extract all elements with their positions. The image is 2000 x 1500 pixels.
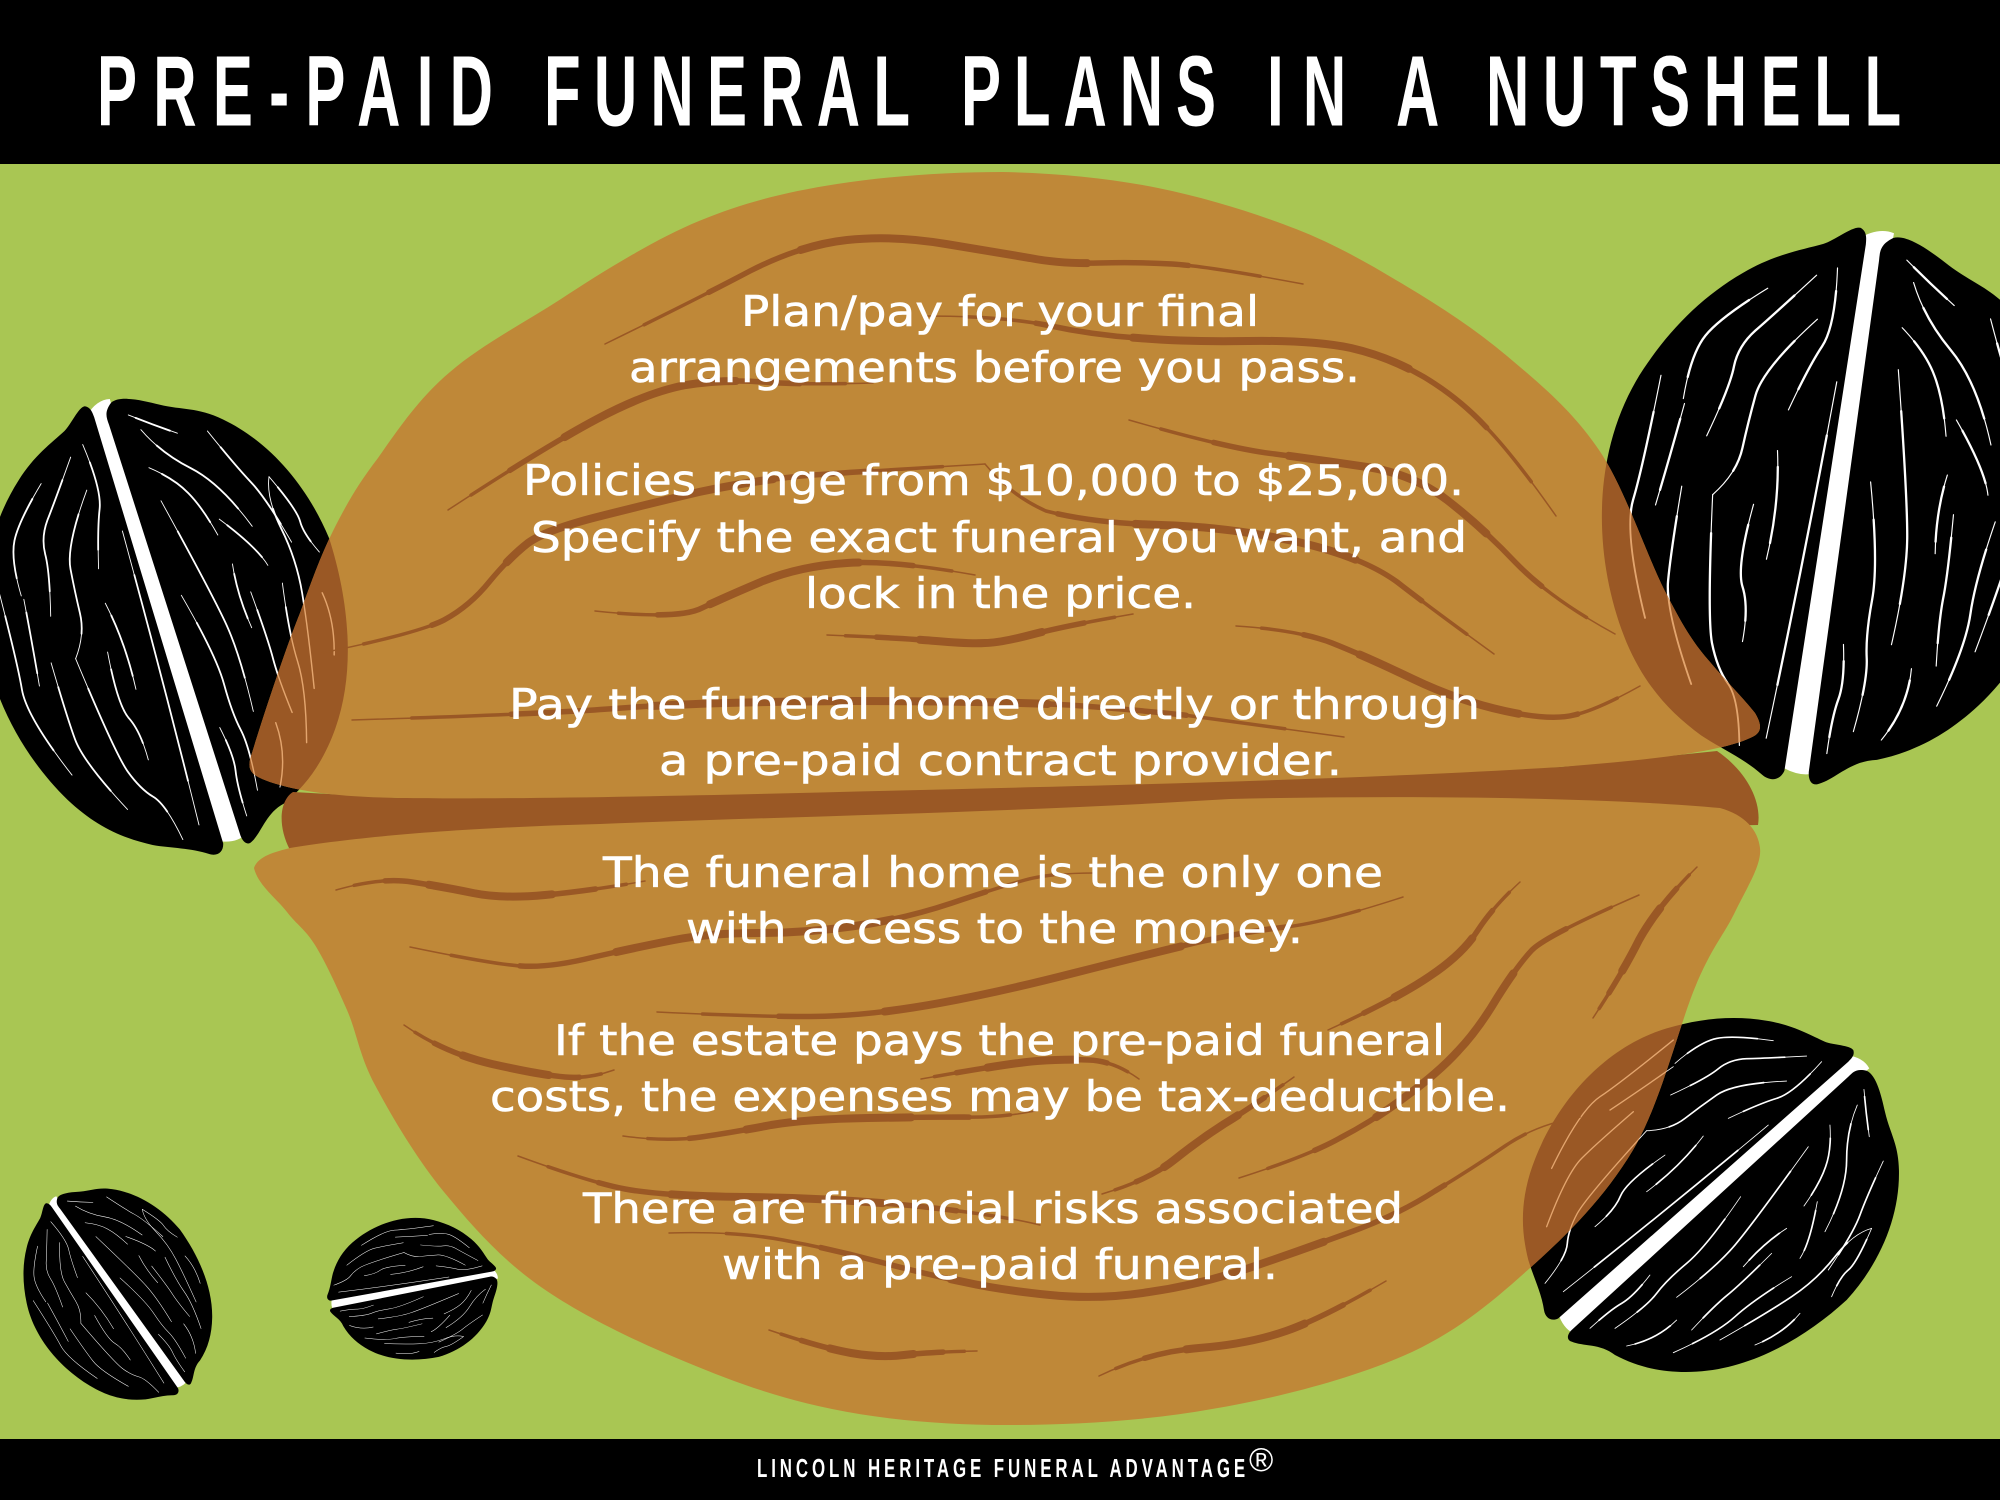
text block: pay the funeral home: a pre-paid contract provider. xyxy=(659,736,1342,785)
text block: access to the money: The funeral home is the only one xyxy=(602,848,1383,897)
footer brand text: ® xyxy=(1249,1441,1273,1478)
text block: plan and pay: arrangements before you pass. xyxy=(629,343,1360,392)
text block: access to the money xyxy=(602,848,1383,953)
text block: tax deductible: If the estate pays the pre-paid funeral xyxy=(554,1016,1445,1065)
icon: small walnut, bottom left xyxy=(15,1176,220,1412)
icon: walnut, bottom right xyxy=(1523,1018,1899,1372)
text block: policies range: lock in the price. xyxy=(805,569,1196,618)
title: PRE-PAID xyxy=(97,36,493,147)
icon: largest walnut, right xyxy=(1482,154,2000,859)
title xyxy=(97,36,1901,147)
text block: pay the funeral home: Pay the funeral home directly or through xyxy=(509,680,1480,729)
walnut overlaps seen through the nut xyxy=(249,462,1760,1268)
text block: tax deductible xyxy=(490,1016,1510,1121)
nut upper half xyxy=(249,172,1760,798)
header bar xyxy=(0,0,2000,164)
icon: giant walnut shell behind the text xyxy=(249,172,1760,1425)
title: A xyxy=(1396,36,1439,147)
nut shell veins xyxy=(322,238,1697,1376)
text block: policies range xyxy=(523,456,1467,618)
text block: policies range: Specify the exact funeral you want, and xyxy=(531,513,1467,562)
footer brand text: LINCOLN HERITAGE FUNERAL ADVANTAGE xyxy=(757,1453,1245,1483)
text block: financial risks: with a pre-paid funeral. xyxy=(722,1240,1278,1289)
text block: plan and pay: Plan/pay for your final xyxy=(741,287,1259,336)
text block: financial risks: There are financial risks associated xyxy=(582,1184,1403,1233)
nut lower half xyxy=(254,797,1760,1425)
nut seam band xyxy=(282,751,1759,850)
text block: pay the funeral home xyxy=(509,680,1480,785)
title: NUTSHELL xyxy=(1486,36,1901,147)
text block: financial risks xyxy=(582,1184,1403,1289)
icon: large walnut, left xyxy=(0,343,423,907)
text block: policies range: Policies range from $10,000 to $25,000. xyxy=(523,456,1464,505)
text block: access to the money: with access to the money. xyxy=(686,904,1303,953)
title: PLANS xyxy=(961,36,1216,147)
title: FUNERAL xyxy=(544,36,910,147)
text block: tax deductible: costs, the expenses may be tax-deductible. xyxy=(490,1072,1510,1121)
title: IN xyxy=(1267,36,1346,147)
footer brand text xyxy=(757,1441,1273,1483)
footer bar xyxy=(0,1439,2000,1500)
icon: smallest walnut, bottom left xyxy=(306,1185,520,1394)
text block: plan and pay xyxy=(629,287,1360,392)
